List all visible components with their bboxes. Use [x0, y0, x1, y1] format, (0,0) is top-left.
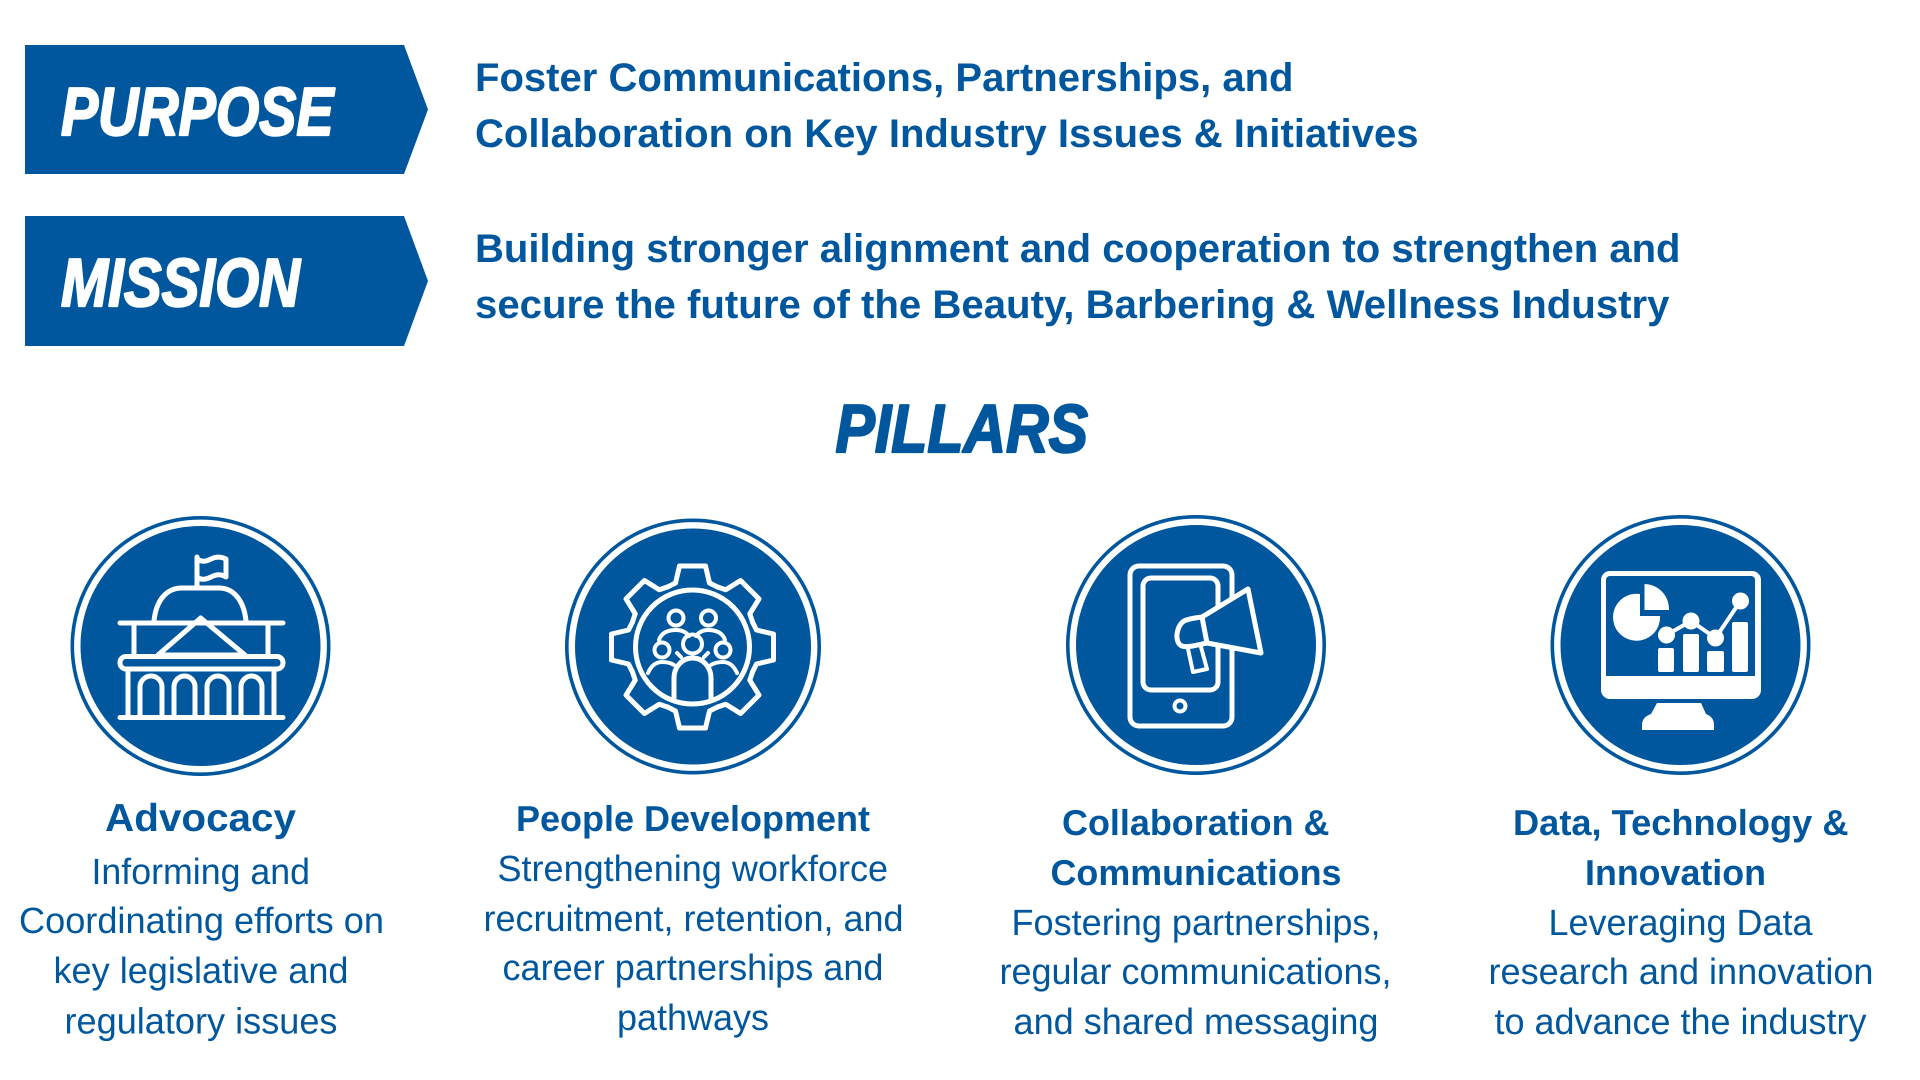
icon: tablet with megaphone [1068, 517, 1324, 773]
pillar description: advocacy: Informing and [92, 851, 310, 892]
pillar description: collaboration and communications: and shared messaging [1014, 1001, 1378, 1042]
pillar description: people development: career partnerships and [502, 947, 884, 988]
pillar description: collaboration and communications: regular communications, [1000, 951, 1392, 992]
pillar description: data, technology and innovation: research and innovation [1488, 951, 1874, 992]
pillar description: collaboration and communications [1000, 902, 1392, 1042]
icon: gear with people [567, 520, 819, 773]
mission statement: Building stronger alignment and cooperation to strengthen and [475, 227, 1680, 271]
pillar description: data, technology and innovation [1488, 902, 1874, 1042]
pillar title: collaboration and communications: Communications [1050, 852, 1342, 893]
pillar description: people development: Strengthening workforce [498, 848, 888, 889]
pillar description: people development: pathways [617, 997, 769, 1038]
panel: collaboration and communications pillar [1000, 517, 1392, 1042]
mission arrow banner [25, 216, 428, 346]
panel: mission [25, 216, 1680, 346]
panel: people development pillar [484, 520, 904, 1038]
heading: pillars: PILLARS [836, 391, 1088, 467]
panel: advocacy pillar [19, 518, 384, 1042]
mission statement: secure the future of the Beauty, Barbering & Wellness Industry [475, 283, 1670, 327]
pillar title: data, technology and innovation: Innovation [1585, 852, 1766, 893]
pillar description: advocacy: key legislative and [54, 950, 348, 991]
pillar title: advocacy: Advocacy [105, 797, 296, 840]
purpose statement [475, 56, 1418, 156]
icon: capitol building [72, 518, 329, 774]
pillar title: people development: People Development [516, 798, 870, 839]
pillar title: data, technology and innovation: Data, Technology & [1513, 802, 1848, 843]
pillar description: people development: recruitment, retention, and [484, 898, 904, 939]
purpose statement: Foster Communications, Partnerships, and [475, 56, 1294, 100]
pillar description: advocacy: regulatory issues [64, 1000, 338, 1042]
mission arrow banner: MISSION [61, 245, 302, 321]
panel: purpose [25, 45, 1418, 174]
icon: monitor with charts [1552, 517, 1809, 773]
purpose statement: Collaboration on Key Industry Issues & Initiatives [475, 112, 1418, 156]
pillar description: advocacy: Coordinating efforts on [19, 900, 384, 941]
pillar description: people development [484, 848, 904, 1038]
purpose arrow banner [25, 45, 428, 174]
pillar description: data, technology and innovation: Leveraging Data [1548, 902, 1813, 943]
pillar description: advocacy [19, 851, 384, 1042]
panel: data, technology and innovation pillar [1488, 517, 1874, 1042]
pillar description: data, technology and innovation: to advance the industry [1494, 1001, 1867, 1042]
pillar description: collaboration and communications: Fostering partnerships, [1012, 902, 1380, 943]
purpose arrow banner: PURPOSE [61, 74, 336, 150]
pillar title: data, technology and innovation [1513, 802, 1848, 893]
pillar title: collaboration and communications: Collaboration & [1062, 802, 1330, 843]
pillar title: collaboration and communications [1050, 802, 1342, 893]
mission statement [475, 227, 1680, 327]
